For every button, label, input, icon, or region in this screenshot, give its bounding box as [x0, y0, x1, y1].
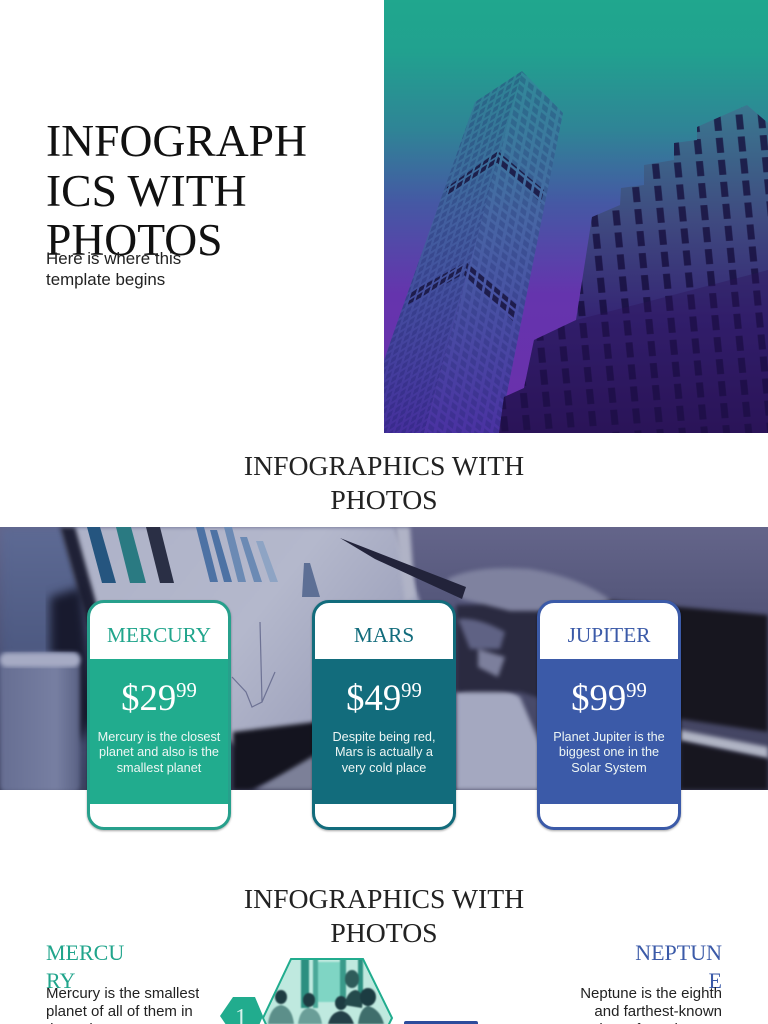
card title: MERCURY [107, 623, 211, 647]
card title: JUPITER [568, 623, 650, 647]
text: Neptune: Neptune is the eighth [580, 985, 722, 1002]
card: Jupiter [537, 600, 681, 830]
hexagon photo top: blue [404, 1021, 478, 1024]
photo: skyscrapers with gradient [384, 0, 768, 433]
card band [90, 659, 228, 804]
card: Mars [312, 600, 456, 830]
description: biggest one in the [559, 745, 659, 759]
description: Mercury is the closest [98, 730, 220, 744]
white paper and cloth [395, 527, 768, 790]
title [46, 115, 307, 265]
price: $2999 [121, 677, 197, 718]
subtitle [46, 249, 181, 288]
card: Mercury [87, 600, 231, 830]
description: Planet Jupiter is the [553, 730, 665, 744]
sleeve [590, 599, 768, 790]
hexagon photo: team meeting [262, 958, 394, 1024]
label: Neptune: E [709, 968, 722, 993]
right building [499, 105, 768, 433]
description [553, 730, 665, 775]
title: ICS WITH [46, 164, 247, 216]
heading: section 3: INFOGRAPHICS WITH [244, 883, 524, 914]
description [98, 730, 220, 775]
description: Mars is actually a [335, 745, 433, 759]
title: PHOTOS [46, 214, 223, 265]
label: Mercury: RY [46, 968, 75, 993]
description: smallest planet [117, 761, 201, 775]
description: planet and also is the [99, 745, 219, 759]
price: $4999 [346, 677, 422, 718]
card band [540, 659, 678, 804]
card band [315, 659, 453, 804]
photo: business analysis banner [0, 527, 768, 790]
label: Mercury [46, 940, 124, 993]
label: Mercury: MERCU [46, 940, 124, 965]
heading: section 2 [244, 450, 524, 514]
label: Neptune [635, 940, 722, 993]
text: Mercury: planet of all of them in [46, 1003, 193, 1020]
pen [340, 538, 466, 599]
desk and keyboard [233, 722, 400, 790]
text: Neptune: and farthest-known [594, 1003, 722, 1020]
label: Neptune: NEPTUN [635, 940, 722, 965]
laptop screen [50, 527, 425, 757]
heading: section 3: PHOTOS [330, 916, 438, 948]
subtitle: Here is where this [46, 249, 181, 268]
description [332, 730, 435, 775]
price: $9999 [571, 677, 647, 718]
subtitle: template begins [46, 270, 165, 288]
text: Mercury [46, 985, 199, 1024]
text: Mercury: Mercury is the smallest [46, 985, 199, 1002]
description: Despite being red, [332, 730, 435, 744]
number badge 1 [220, 997, 263, 1024]
heading: section 2: PHOTOS [330, 484, 438, 514]
description: very cold place [342, 761, 426, 775]
card title: MARS [354, 623, 414, 647]
text: Neptune [580, 985, 722, 1024]
heading: section 3 [244, 883, 524, 948]
tower [384, 71, 563, 433]
heading: section 2: INFOGRAPHICS WITH [244, 450, 524, 481]
hand [447, 568, 612, 717]
description: Solar System [571, 761, 647, 775]
coffee cup [0, 652, 80, 792]
title: INFOGRAPH [46, 115, 307, 166]
